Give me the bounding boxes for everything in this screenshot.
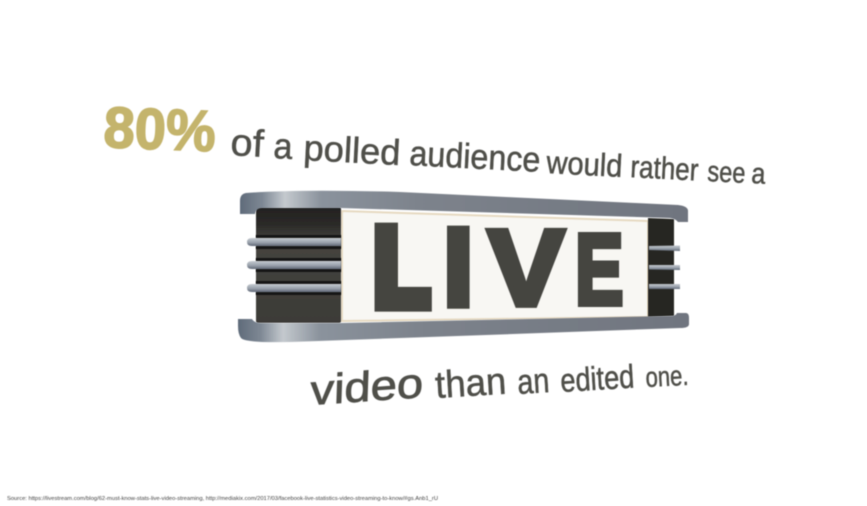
text: see: see xyxy=(707,156,746,190)
text: an: an xyxy=(516,361,550,402)
left dark column xyxy=(256,207,341,323)
headline bottom line xyxy=(310,358,689,414)
letter L: L xyxy=(374,205,430,329)
LIVE lettering xyxy=(374,205,623,329)
letter V: V xyxy=(488,208,564,328)
left column seams xyxy=(256,235,341,295)
text: of: of xyxy=(229,122,265,166)
text: one.: one. xyxy=(645,360,689,393)
right slats xyxy=(649,246,680,289)
text: than: than xyxy=(434,361,507,407)
text: would: would xyxy=(545,144,623,184)
letter I: I xyxy=(446,209,471,326)
text: video: video xyxy=(310,359,424,414)
source footnote: Source: https://livestream.com/blog/62-must-know-stats-live-video-streaming, http://mediakix.com/2017/03/facebook-live-statistics-video-streaming-to-know/#gs.Anb1_rU xyxy=(7,496,438,502)
bottom chrome bar xyxy=(238,313,689,342)
live marquee sign xyxy=(238,191,689,342)
text: a: a xyxy=(273,125,295,167)
text: polled: polled xyxy=(303,127,402,173)
text: rather: rather xyxy=(630,149,699,188)
text: audience: audience xyxy=(409,134,541,180)
right dark column xyxy=(648,218,674,317)
stat: 80%: 80% xyxy=(103,95,217,164)
text: a (end): a xyxy=(751,158,767,191)
left slats xyxy=(247,238,341,292)
top chrome bar xyxy=(240,191,688,222)
sign panel xyxy=(342,211,648,321)
headline top line xyxy=(103,95,767,191)
text: edited: edited xyxy=(559,358,635,399)
letter E: E xyxy=(575,214,623,326)
